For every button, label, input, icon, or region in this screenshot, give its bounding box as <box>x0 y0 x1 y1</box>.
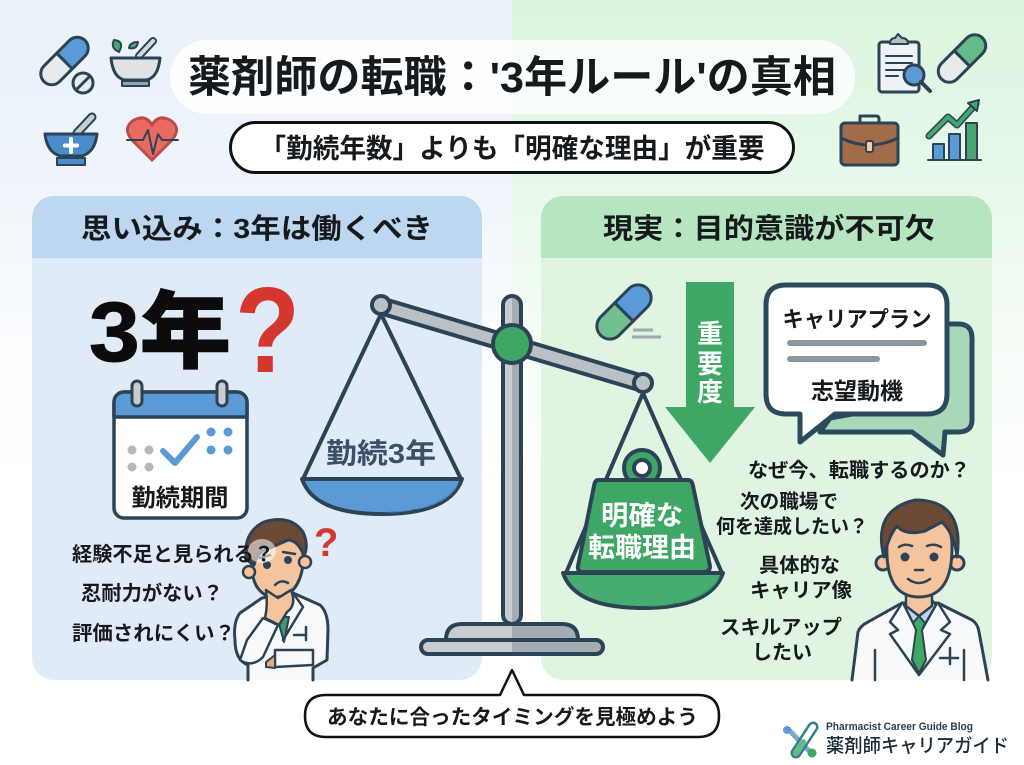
callout: find your timing <box>305 670 719 737</box>
weight text: 転職理由 <box>588 533 696 563</box>
big label: 3 years: 3年 <box>89 285 231 379</box>
text: questions: なぜ今、転職するのか？ <box>748 459 970 482</box>
arrow label: 重 <box>697 319 723 349</box>
bubble text <box>782 307 932 404</box>
scale post <box>503 296 521 624</box>
right strings <box>566 393 722 573</box>
logo name: 薬剤師キャリアガイド <box>826 735 1009 757</box>
arrow label: 度 <box>697 377 723 407</box>
icon: growth chart <box>928 100 981 160</box>
text: questions: スキルアップ <box>720 616 842 639</box>
front bubble <box>766 285 947 442</box>
subtitle pill: 「勤続年数」よりも「明確な理由」が重要 <box>260 133 764 164</box>
callout: find your timing: あなたに合ったタイミングを見極めよう <box>327 705 698 729</box>
panel: reality <box>541 196 992 680</box>
text: questions: キャリア像 <box>750 579 852 602</box>
arrow: importance <box>665 282 755 463</box>
logo mark <box>783 726 816 758</box>
big red question mark: ? <box>235 262 300 398</box>
character: worried pharmacist <box>235 520 328 680</box>
text: questions: 何を達成したい？ <box>716 515 868 538</box>
character: confident pharmacist <box>852 500 988 680</box>
scale base <box>421 624 603 654</box>
pivots <box>372 296 652 392</box>
panel: misconception <box>32 196 482 680</box>
logo tagline: Pharmacist Career Guide Blog <box>826 721 973 733</box>
panel heading: misconception: 思い込み：3年は働くべき <box>81 213 433 244</box>
text: worries: 忍耐力がない？ <box>81 581 223 605</box>
left strings <box>303 314 461 479</box>
speech bubbles <box>766 285 972 455</box>
small question mark: ? <box>314 521 338 565</box>
icon: herbal mortar <box>111 40 160 86</box>
bubble text: キャリアプラン <box>782 307 932 332</box>
text: worries: 評価されにくい？ <box>72 622 235 645</box>
back bubble <box>820 324 972 455</box>
calendar label: 勤続期間 <box>132 485 228 512</box>
arrow label <box>697 319 723 407</box>
icon: green capsule <box>934 30 990 87</box>
subtitle pill <box>230 122 794 172</box>
weight <box>578 450 710 572</box>
icon: heart with pulse <box>127 118 178 160</box>
logo <box>783 721 1009 758</box>
text: questions: 具体的な <box>759 554 840 577</box>
title pill <box>170 40 855 114</box>
text: worries <box>72 539 276 645</box>
right pan <box>563 573 723 608</box>
weight text: 明確な <box>601 501 683 531</box>
title: 薬剤師の転職：'3年ルール'の真相 <box>188 54 836 102</box>
text: questions: したい <box>752 642 812 664</box>
scale beam <box>376 298 647 391</box>
panel heading: reality: 現実：目的意識が不可欠 <box>603 212 935 244</box>
balance scale <box>302 296 723 654</box>
icon: calendar <box>114 381 247 518</box>
icon: capsule and tablet <box>36 33 93 93</box>
weight text <box>588 501 696 563</box>
icon: briefcase <box>841 116 898 165</box>
text: questions <box>716 459 970 664</box>
left pan <box>302 479 462 514</box>
left weight label: 勤続3年 <box>326 438 436 469</box>
text: questions: 次の職場で <box>740 491 838 513</box>
arrow label: 要 <box>697 349 723 379</box>
bubble text: 志望動機 <box>811 378 903 404</box>
icon: clipboard with magnifier <box>879 34 930 92</box>
icon: blue mortar <box>45 117 97 165</box>
icon: blue-green capsule <box>591 279 661 345</box>
text: worries: 経験不足と見られる？ <box>72 543 274 566</box>
